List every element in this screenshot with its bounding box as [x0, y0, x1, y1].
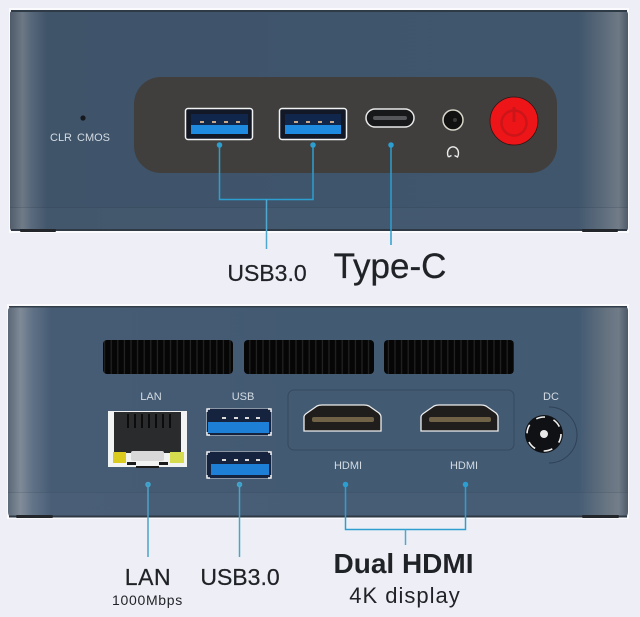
callout: USB3.0 rear [200, 482, 280, 590]
connector line [389, 143, 393, 245]
front port panel [134, 77, 557, 173]
icon: headphones [448, 147, 458, 157]
label: Dual HDMI [334, 548, 474, 579]
device body rear [7, 304, 629, 519]
connector line [238, 482, 242, 557]
USB port label: USB [232, 391, 254, 403]
audio jack [443, 110, 463, 130]
clear CMOS pinhole and label [50, 115, 110, 144]
panel: front view of device [9, 8, 629, 233]
connector lines [344, 482, 468, 545]
USB-C port [366, 109, 414, 127]
speed label: 1000Mbps [112, 592, 183, 608]
HDMI port left [304, 405, 381, 431]
power button [490, 97, 538, 145]
callout: Dual HDMI [334, 482, 474, 608]
rear USB port top [206, 408, 272, 436]
HDMI port right [421, 405, 498, 431]
HDMI labels [334, 460, 478, 472]
panel: rear view of device [7, 304, 629, 519]
callout: LAN [112, 482, 183, 608]
label: Type-C [334, 247, 446, 286]
rear USB port bottom [206, 452, 272, 478]
LAN port [108, 411, 187, 468]
clear CMOS pinhole and label: CMOS [77, 132, 110, 144]
label: USB3.0 [200, 564, 280, 590]
connector line [146, 482, 150, 557]
DC label: DC [543, 391, 559, 403]
HDMI labels: HDMI [334, 460, 362, 472]
HDMI group frame [288, 390, 514, 450]
callout: Type-C [334, 143, 446, 286]
DC jack [525, 407, 577, 463]
label: LAN [125, 564, 171, 590]
LAN port label: LAN [140, 391, 162, 403]
connector lines [218, 143, 315, 249]
sub label: 4K display [349, 583, 461, 608]
label: USB3.0 [227, 260, 307, 286]
callout: USB3.0 front [218, 143, 315, 286]
ventilation slots [103, 340, 514, 374]
USB port 1 [186, 108, 252, 140]
device body front [9, 8, 629, 233]
HDMI labels: HDMI [450, 460, 478, 472]
clear CMOS pinhole and label: CLR [50, 132, 72, 144]
USB port 2 [280, 108, 346, 140]
